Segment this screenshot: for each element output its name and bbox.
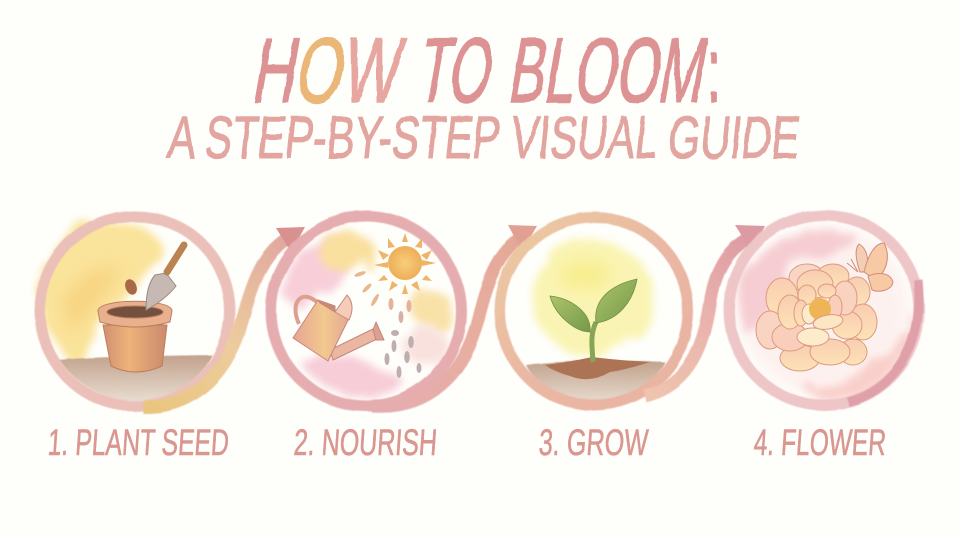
wash: pink	[282, 238, 354, 310]
wash: yellow	[40, 220, 159, 366]
icon: peony	[756, 264, 877, 371]
icon: seed	[123, 278, 139, 296]
label: step 3: 3. GROW	[538, 421, 650, 463]
title line 1: How to Bloom: HOW	[247, 19, 411, 122]
wash: yellow glow	[533, 240, 653, 356]
icon: sprout stem	[592, 322, 596, 362]
wash: pink left	[738, 231, 855, 335]
title line 1: How to Bloom: :	[707, 20, 721, 122]
icon: right leaf	[596, 279, 637, 323]
arrow: step 3 to step 4	[645, 225, 765, 396]
step 4: flower	[729, 215, 919, 405]
step 3: grow	[500, 217, 688, 405]
wash: pink bottom	[300, 356, 405, 396]
title line 1: How to Bloom: BLOOM	[503, 19, 716, 122]
ring	[729, 215, 919, 405]
icon: sun	[354, 233, 436, 307]
icon: butterfly	[847, 243, 893, 291]
wash: pale interior	[740, 226, 908, 394]
icon: left leaf	[550, 296, 590, 332]
front petal	[812, 313, 844, 331]
wash: pink lower right	[403, 325, 447, 365]
arrow: step 2 to step 3	[372, 225, 537, 406]
outer petals	[756, 264, 877, 371]
label: step 2: 2. NOURISH	[293, 421, 439, 463]
step 1: plant seed	[40, 216, 230, 406]
icon: watering can	[293, 295, 384, 361]
wash: yellow right	[413, 291, 453, 329]
ground	[58, 355, 212, 403]
ring accent	[848, 280, 919, 402]
icon: pot	[98, 301, 172, 372]
icon: trowel	[146, 245, 184, 310]
wash: deep yellow	[62, 268, 120, 335]
inner petals	[794, 284, 842, 326]
wash: yellow highlight	[559, 260, 611, 290]
label: step 4: 4. FLOWER	[753, 421, 888, 463]
ground	[526, 361, 665, 405]
middle petals	[778, 270, 857, 346]
title line 1: How to Bloom	[247, 19, 721, 122]
step labels	[47, 421, 888, 463]
title	[165, 19, 803, 171]
wash: yellow top	[319, 232, 375, 272]
arrow: step 1 to step 2	[143, 227, 305, 407]
flower centre	[809, 298, 831, 320]
icon: water drops	[384, 298, 422, 378]
step 2: nourish	[271, 216, 461, 406]
ring	[40, 216, 230, 406]
wash: pink lower right	[805, 310, 912, 402]
soil mound	[545, 357, 650, 379]
label: step 1: 1. PLANT SEED	[47, 421, 231, 463]
title line 1: How to Bloom: TO	[412, 19, 502, 122]
ring	[500, 217, 688, 405]
ring	[271, 216, 461, 406]
